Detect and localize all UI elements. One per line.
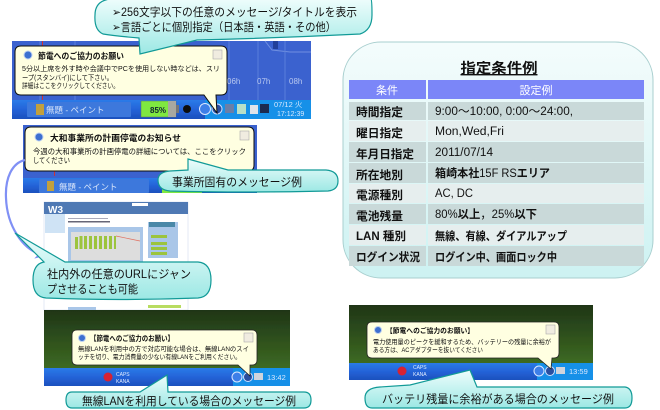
table: conditions: 設定例 <box>520 83 552 97</box>
table: conditions: 時間指定 <box>356 105 404 119</box>
callout: message and title capabilities: ➢言語ごとに個別指定（日本語・英語・その他） <box>112 20 336 34</box>
balloon: wireless LAN message <box>72 330 257 376</box>
balloon: planned outage notice: してください <box>33 156 70 165</box>
balloon: battery message: ある方は、ACアダプターを抜いてください <box>373 345 483 354</box>
table: conditions: ログイン状況 <box>356 250 420 264</box>
table: conditions: Mon,Wed,Fri <box>435 126 504 138</box>
table: conditions: ログイン中、画面ロック中 <box>435 250 557 264</box>
screenshot: battery desktop: KANA <box>413 372 427 378</box>
callout: jump to any URL: プさせることも可能 <box>47 282 138 296</box>
balloon: power saving request: 節電へのご協力のお願い <box>38 51 124 61</box>
callout: site specific message example <box>158 159 338 192</box>
balloon: power saving request: ープ(スタンバイ)にして下さい。 <box>22 73 113 82</box>
balloon: battery message <box>367 322 559 369</box>
callout: message and title capabilities <box>95 0 372 54</box>
balloon: wireless LAN message: 無線LANを利用中の方で対応可能な場合は、無線LANのスイ <box>78 344 249 353</box>
balloon: planned outage notice: 今週の大和事業所の計画停電の詳細については、ここをクリック <box>33 146 246 156</box>
callout: wireless LAN example: 無線LANを利用している場合のメッセージ例 <box>82 394 296 408</box>
balloon: battery message: 電力使用量のピークを緩和するため、バッテリーの残量に余裕が <box>373 337 551 346</box>
balloon: battery message: 【節電へのご協力のお願い】 <box>386 326 474 335</box>
screenshot: battery desktop <box>349 305 593 380</box>
screenshot: battery desktop: 13:59 <box>569 367 588 376</box>
arrow: jump to URL <box>6 160 43 255</box>
table: conditions: 電池残量 <box>356 209 404 223</box>
balloon: power saving request <box>15 46 227 113</box>
table: conditions: 電源種別 <box>356 188 403 202</box>
balloon: wireless LAN message: 【節電へのご協力のお願い】 <box>90 333 174 343</box>
screenshot: power saving balloon on taskbar: 07/12 火 <box>274 100 303 109</box>
balloon: power saving request: 5分以上席を外す時や会議中でPCを使用しない時などは、スリ <box>22 64 220 73</box>
table: conditions: 80%以上，25%以下 <box>435 208 537 221</box>
table: conditions: 無線、有線、ダイアルアップ <box>435 229 567 243</box>
callout: message and title capabilities: ➢256文字以下の任意のメッセージ/タイトルを表示 <box>112 5 357 19</box>
balloon: power saving request: 詳細はここをクリックしてください。 <box>22 81 119 90</box>
balloon: wireless LAN message: ッチを切り、電力消費量の少ない有線LANをご利用ください。 <box>78 352 241 361</box>
screenshot: wireless LAN desktop: KANA <box>116 379 130 385</box>
callout: battery example <box>365 370 632 408</box>
screenshot: power saving balloon on taskbar: 08h <box>289 77 302 86</box>
table: conditions: 条件 <box>376 83 398 97</box>
screenshot: site specific taskbar: 無題 - ペイント <box>59 182 118 192</box>
callout: wireless LAN example <box>66 375 311 408</box>
callout: battery example: バッテリ残量に余裕がある場合のメッセージ例 <box>382 392 614 406</box>
table: conditions: LAN 種別 <box>356 229 406 243</box>
table: conditions <box>349 80 644 266</box>
panel heading: 指定条件例 <box>460 60 538 76</box>
screenshot: wireless LAN desktop <box>44 310 290 386</box>
screenshot: power saving balloon on taskbar: 17:12:39 <box>277 111 304 118</box>
screenshot: intranet web page: W3 <box>48 205 63 216</box>
screenshot: intranet web page <box>44 202 188 310</box>
panel: specified condition examples <box>343 42 653 278</box>
balloon: planned outage notice <box>25 127 254 171</box>
table: conditions: 2011/07/14 <box>435 147 494 159</box>
table: conditions: AC, DC <box>435 188 473 200</box>
callout: jump to any URL: 社内外の任意のURLにジャン <box>47 267 191 281</box>
screenshot: site specific taskbar <box>23 125 257 193</box>
table: conditions: 箱崎本社15F RSエリア <box>435 166 550 180</box>
screenshot: wireless LAN desktop: 13:42 <box>267 373 286 382</box>
callout: jump to any URL <box>15 233 211 300</box>
table: conditions: 曜日指定 <box>356 126 404 140</box>
screenshot: power saving balloon on taskbar: 85% <box>150 106 166 115</box>
table: conditions: 年月日指定 <box>356 147 415 161</box>
screenshot: power saving balloon on taskbar: 無題 - ペイント <box>46 105 105 115</box>
balloon: planned outage notice: 大和事業所の計画停電のお知らせ <box>50 133 181 143</box>
callout: site specific message example: 事業所固有のメッセージ例 <box>172 175 302 189</box>
screenshot: wireless LAN desktop: CAPS <box>116 372 130 378</box>
screenshot: battery desktop: CAPS <box>413 365 427 371</box>
screenshot: power saving balloon on taskbar <box>12 41 311 119</box>
screenshot: power saving balloon on taskbar: 06h <box>227 77 240 86</box>
table: conditions: 所在地別 <box>356 168 403 182</box>
screenshot: power saving balloon on taskbar: 07h <box>257 77 270 86</box>
table: conditions: 9:00～10:00, 0:00～24:00, <box>435 106 573 118</box>
